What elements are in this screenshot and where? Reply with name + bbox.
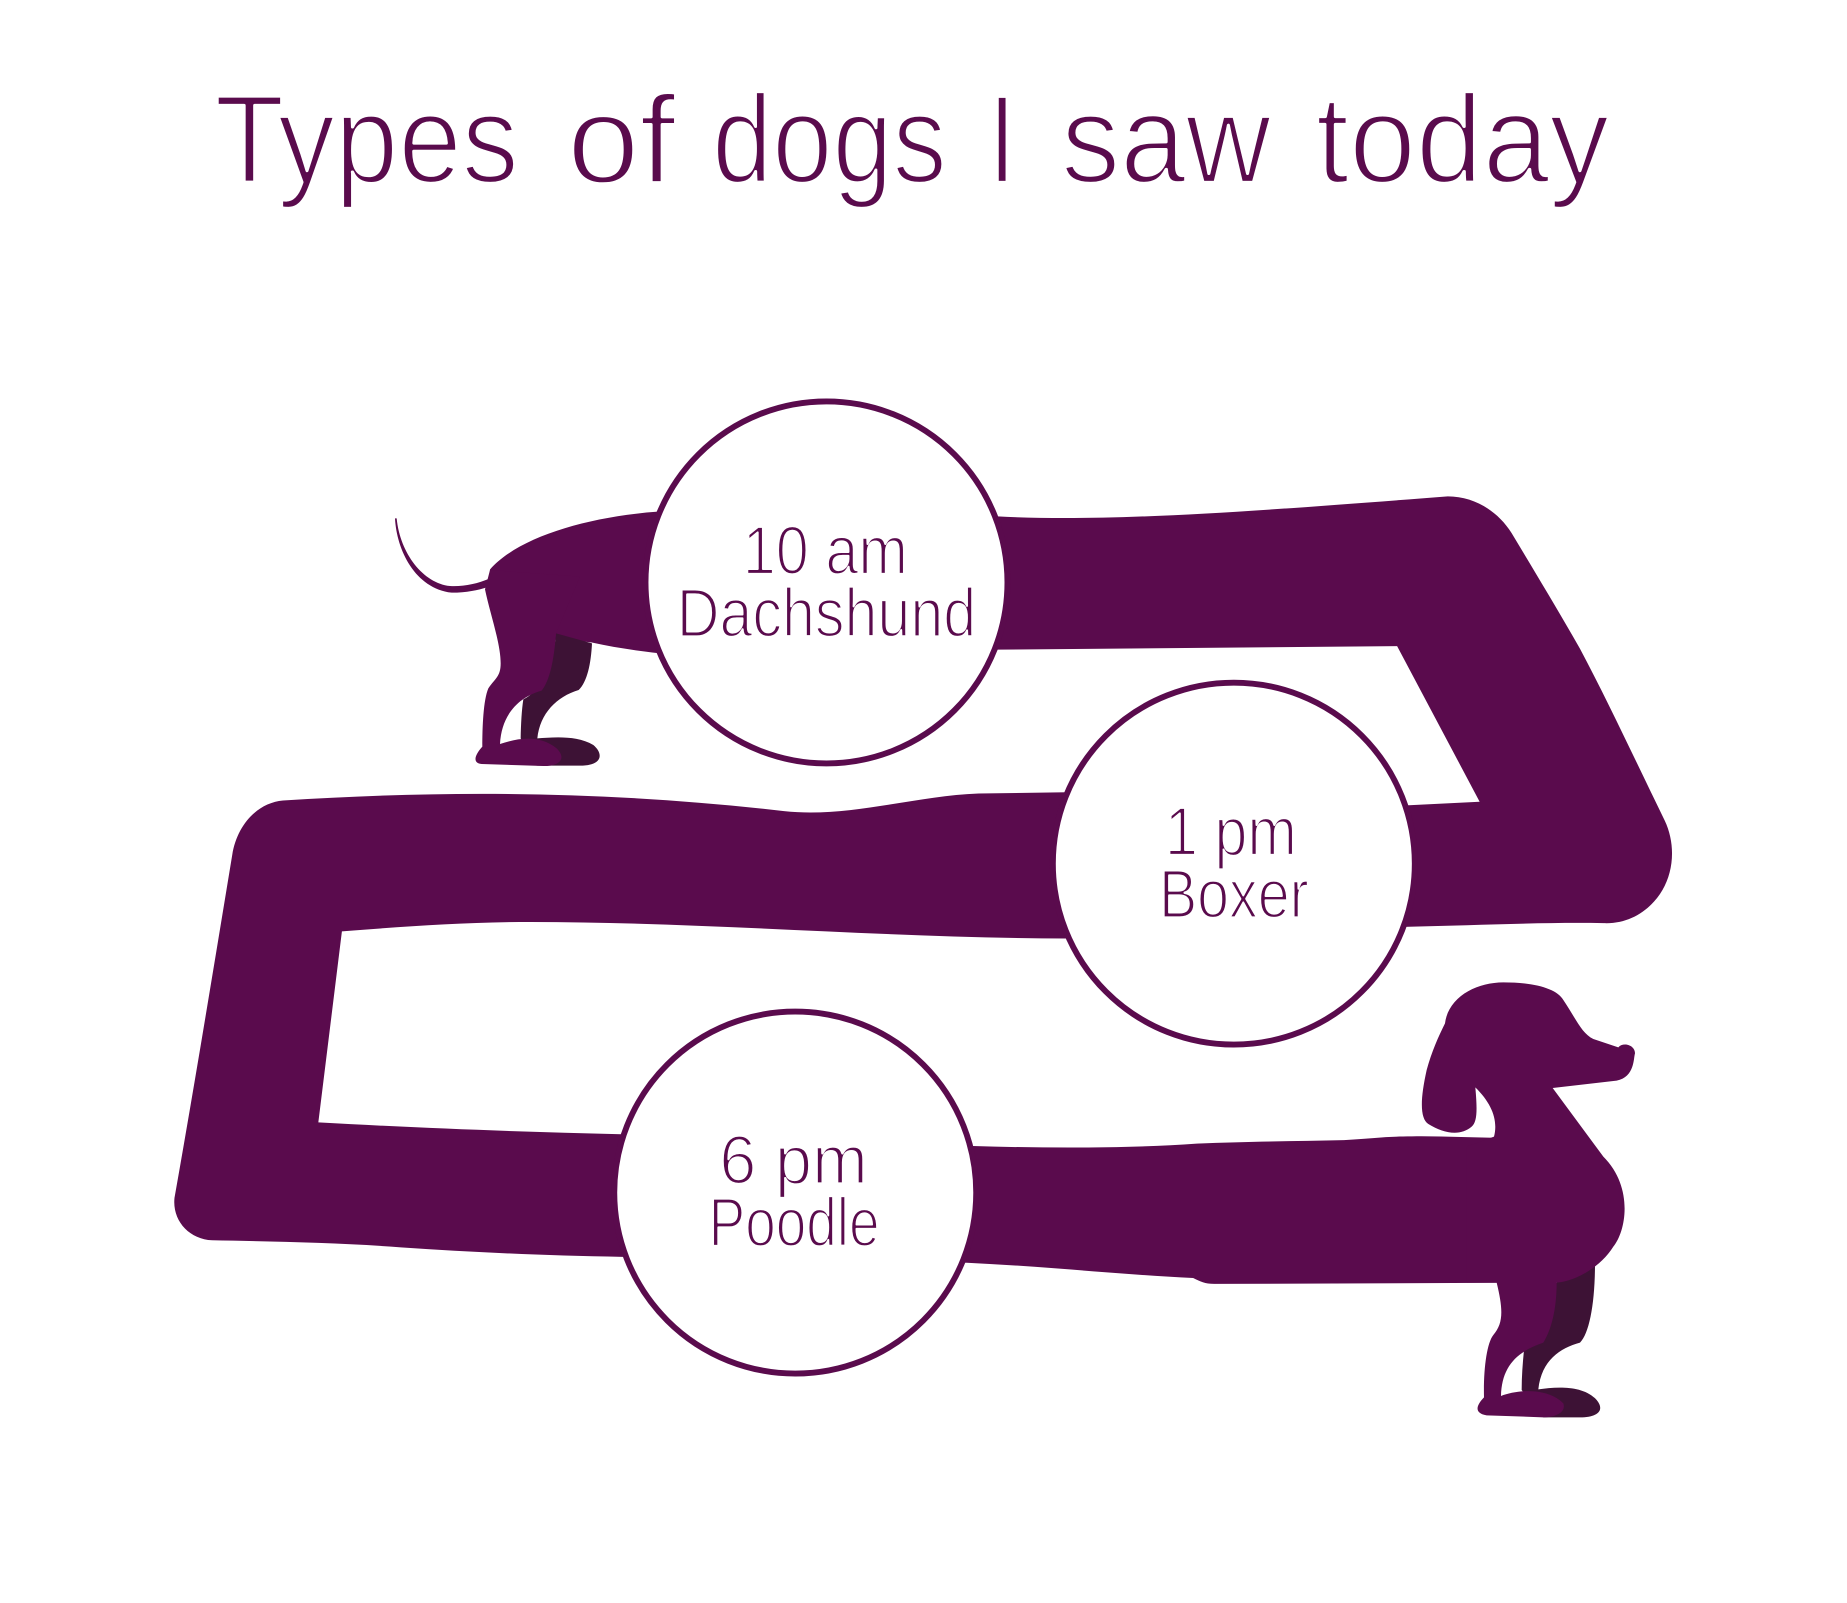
near hind leg and rump <box>475 570 580 766</box>
circle: 6 pm Poodle <box>614 1012 976 1374</box>
title <box>215 71 1610 210</box>
label: 6 pm: 6 pm <box>719 1123 868 1199</box>
label: 10 am: 10 am <box>743 513 908 589</box>
title: saw <box>1061 71 1272 210</box>
dachshund rear with tail and legs <box>395 518 600 766</box>
label: Boxer: Boxer <box>1159 856 1309 932</box>
title: of <box>567 71 676 210</box>
circle: 10 am Dachshund <box>646 401 1007 763</box>
circle: 1 pm Boxer <box>1053 683 1415 1045</box>
dog body ribbon <box>174 496 1672 1284</box>
title: Types <box>215 71 519 210</box>
label: Poodle: Poodle <box>709 1185 880 1261</box>
poodle head, chest and legs <box>1422 982 1635 1417</box>
tail <box>395 518 490 593</box>
title: dogs <box>712 71 947 210</box>
far hind leg <box>521 633 600 766</box>
title: I <box>988 71 1016 210</box>
head, ear, chest and near leg <box>1422 982 1635 1417</box>
label: Dachshund: Dachshund <box>677 576 976 652</box>
label: 1 pm: 1 pm <box>1165 794 1297 870</box>
title: today <box>1316 71 1610 210</box>
far leg <box>1522 1263 1600 1417</box>
